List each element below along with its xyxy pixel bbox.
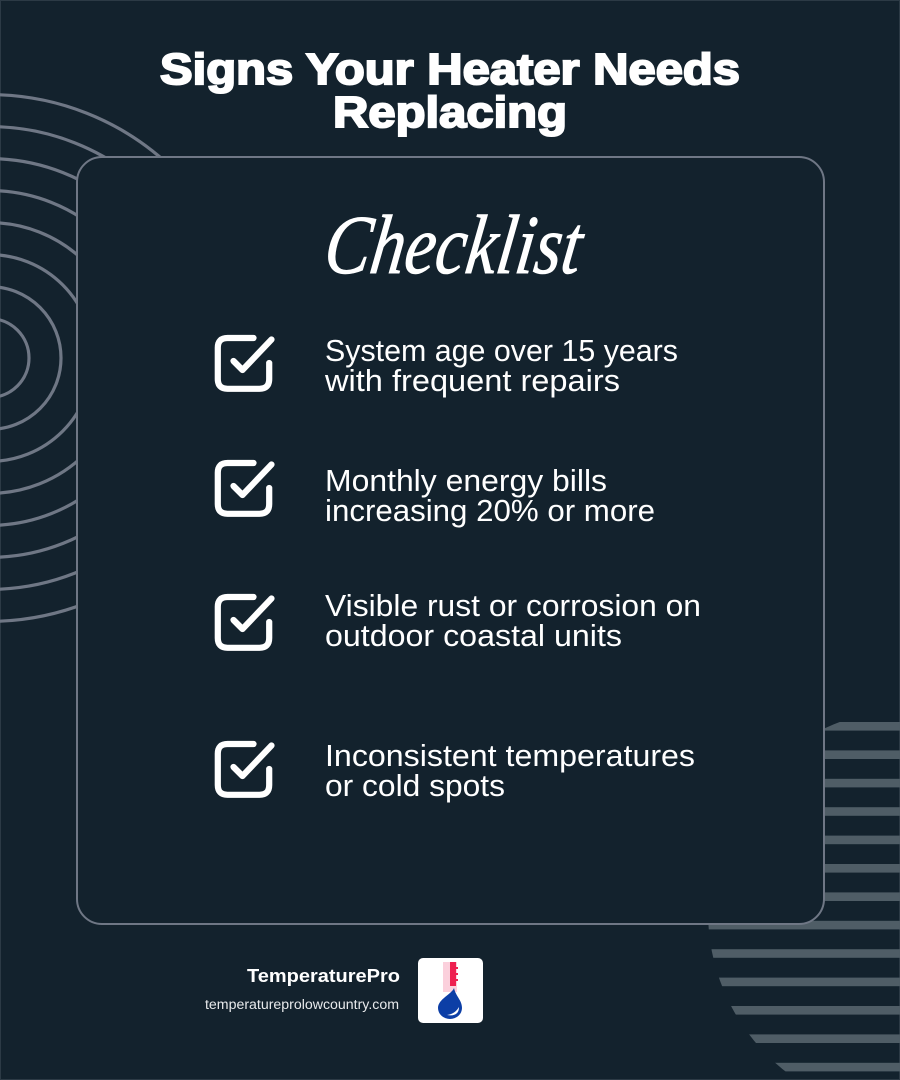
panel: checklist card <box>77 157 824 924</box>
item 1 text: System age over 15 years <box>325 333 678 368</box>
title <box>160 45 740 137</box>
checklist script heading: Checklist <box>319 199 590 292</box>
concentric rings decoration <box>0 95 253 621</box>
item 4 text: or cold spots <box>325 768 505 803</box>
item 3 text <box>325 588 701 653</box>
title: Signs Your Heater Needs <box>160 45 740 94</box>
item 4 text <box>325 738 695 803</box>
checklist item 3 <box>218 588 701 653</box>
checklist item 1 <box>218 333 678 398</box>
item 2 text: increasing 20% or more <box>325 493 655 528</box>
icon: logo <box>418 958 483 1023</box>
item 1 text <box>324 333 678 398</box>
item 2 text <box>325 463 655 528</box>
item 3 text: Visible rust or corrosion on <box>325 588 701 623</box>
footer website: temperatureprolowcountry.com <box>205 997 399 1012</box>
checklist item 2 <box>218 463 655 528</box>
item 2 text: Monthly energy bills <box>325 463 607 498</box>
icon: checkbox 4 <box>218 744 272 795</box>
item 1 text: with frequent repairs <box>324 363 620 398</box>
item 4 text: Inconsistent temperatures <box>325 738 695 773</box>
icon: checkbox 1 <box>218 338 272 389</box>
title: Replacing <box>333 88 567 137</box>
item 3 text: outdoor coastal units <box>325 618 622 653</box>
striped circle decoration <box>700 722 900 1071</box>
footer brand name: TemperaturePro <box>247 966 400 986</box>
checklist item 4 <box>218 738 695 803</box>
icon: checkbox 3 <box>218 597 272 648</box>
icon: checkbox 2 <box>218 463 272 514</box>
